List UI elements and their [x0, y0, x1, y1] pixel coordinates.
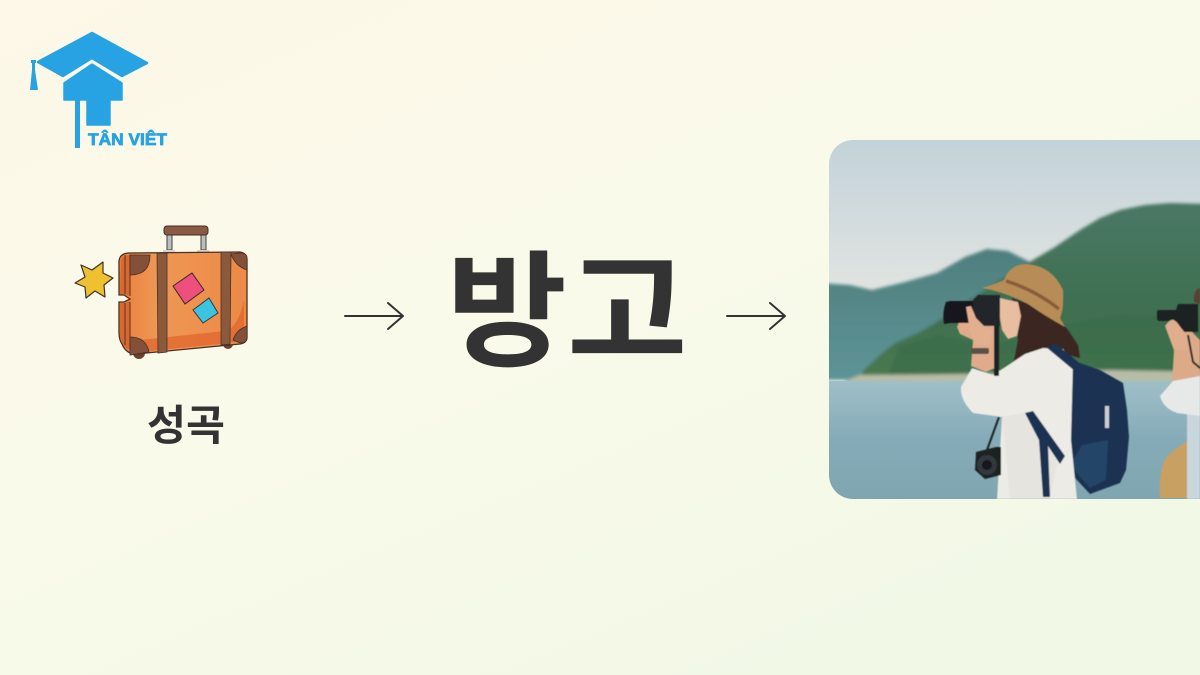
backpack zipper	[1105, 406, 1109, 428]
near mountain	[862, 203, 1200, 382]
hand on camera	[965, 305, 984, 327]
suitcase straps	[157, 252, 231, 353]
hat band	[1006, 281, 1059, 309]
icon: tassel	[30, 60, 38, 90]
sticker blue	[193, 298, 218, 323]
suitcase corners	[130, 253, 247, 355]
backpack highlight	[1070, 440, 1108, 488]
sea	[829, 381, 1200, 499]
icon: graduation cap roof	[38, 33, 147, 76]
person 1: woman with hat	[943, 264, 1129, 499]
person 2 sleeve	[1160, 376, 1200, 416]
logo: Tân Việt	[30, 33, 168, 149]
landscape	[820, 203, 1200, 384]
suitcase body	[119, 252, 247, 354]
person 2 lower shirt	[1187, 412, 1200, 499]
bag strap	[1025, 411, 1065, 497]
logo wordmark: TÂN VIÊT	[88, 130, 168, 149]
heading: 방고: 방고	[446, 242, 688, 383]
photo: travellers photographing a seaside landscape	[820, 140, 1200, 499]
camera lens	[943, 301, 973, 324]
person 2 camera strap	[1188, 335, 1200, 368]
dark treeline	[892, 354, 1173, 372]
backpack	[1070, 355, 1130, 494]
icon: impact star	[75, 262, 113, 298]
arrow 1	[345, 303, 403, 329]
face	[1000, 298, 1021, 339]
suitcase lower shade	[140, 300, 244, 352]
camera body	[973, 295, 1000, 326]
shoreline	[845, 370, 1200, 384]
shoulder strap	[1046, 344, 1078, 372]
person 2 arm	[1172, 321, 1200, 382]
hat	[982, 264, 1065, 327]
sticker pink	[173, 273, 204, 304]
forearm	[956, 322, 995, 372]
suitcase handle	[163, 226, 209, 254]
sky	[829, 140, 1200, 300]
arrow 2	[727, 303, 785, 329]
shirt	[961, 348, 1077, 499]
person 2	[1157, 288, 1200, 499]
suitcase inner rim line	[125, 255, 130, 350]
person 2 straw bag	[1160, 440, 1188, 498]
watch	[971, 348, 989, 354]
lower camera	[975, 447, 1001, 479]
camera strap	[994, 325, 999, 376]
logo vertical bar	[75, 100, 80, 148]
hair	[1012, 298, 1080, 366]
lower camera strap	[987, 417, 999, 450]
icon: upward arrow	[64, 64, 122, 125]
person 2 camera	[1157, 304, 1198, 332]
label: 성곡: 성곡	[147, 402, 225, 449]
icon: damaged suitcase	[75, 226, 247, 359]
person 2 hand	[1165, 320, 1188, 350]
person 2 hair	[1194, 288, 1200, 304]
suitcase left panel	[120, 255, 130, 350]
far mountain	[820, 249, 1030, 380]
shirt shadow	[1026, 418, 1056, 498]
suitcase wheels	[133, 339, 233, 359]
